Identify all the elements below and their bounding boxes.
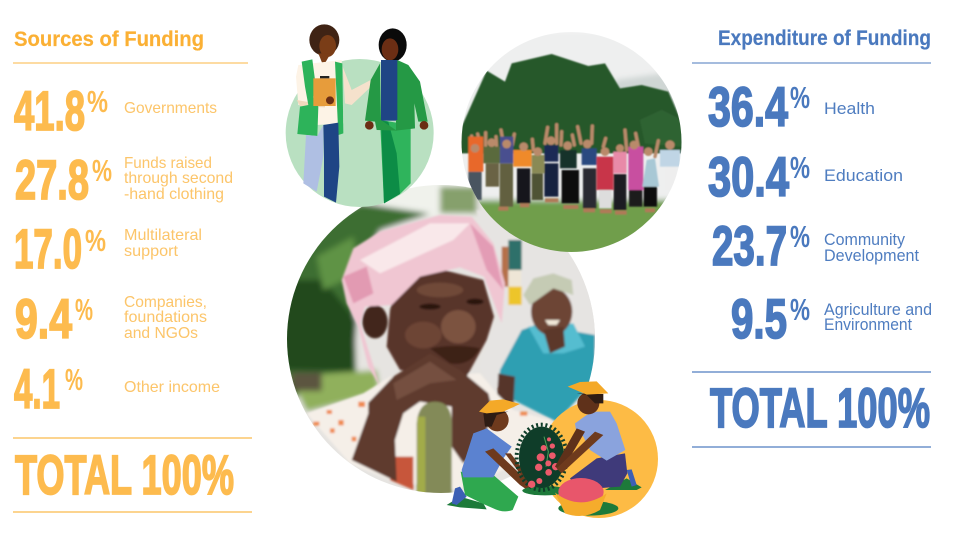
yellow circle background (540, 400, 658, 518)
stat: education: % (790, 150, 810, 185)
stat: education: 30.4 (708, 146, 789, 208)
stat: multilateral support: Multilateral (124, 227, 202, 244)
stat: second-hand clothing: -hand clothing (124, 186, 224, 203)
stat: second-hand clothing: through second (124, 170, 233, 187)
stat: governments: 41.8 (14, 80, 85, 142)
stat: companies: and NGOs (124, 325, 198, 342)
left farmer (447, 399, 533, 511)
stat: companies: Companies, (124, 294, 207, 311)
stat: community development: % (790, 219, 810, 254)
heading: sources of funding: Sources of Funding (14, 27, 204, 51)
stat: community development: 23.7 (712, 215, 787, 277)
stat: multilateral support: % (85, 223, 106, 258)
stat: other income: 4.1 (14, 358, 60, 420)
stat: community development (712, 215, 919, 277)
stat: governments: % (87, 84, 108, 119)
stat: multilateral support: 17.0 (14, 218, 82, 280)
panel: sources of funding (13, 27, 252, 512)
bowl of fruit (555, 478, 618, 516)
photo: smiling woman with pink headwrap (280, 180, 600, 500)
stat: community development: Community (824, 231, 906, 249)
stat: companies: 9.4 (15, 288, 72, 350)
stat: governments (14, 80, 217, 142)
stat: companies: % (75, 292, 93, 327)
illustration: two farmers harvesting fruit (447, 381, 658, 518)
panel: expenditure of funding (692, 26, 932, 447)
fruit bush (517, 425, 568, 495)
stat: health: % (790, 80, 810, 115)
stat: second-hand clothing (15, 149, 233, 211)
total: sources: TOTAL 100% (15, 444, 234, 506)
right farmer (555, 381, 642, 490)
stat: other income (14, 358, 220, 420)
stat: other income: Other income (124, 379, 220, 396)
right worker (365, 28, 428, 203)
stat: agriculture and environment: 9.5 (731, 288, 787, 350)
stat: multilateral support: support (124, 243, 179, 260)
stat: second-hand clothing: 27.8 (15, 149, 89, 211)
stat: governments: Governments (124, 100, 217, 117)
stat: multilateral support (14, 218, 202, 280)
stat: agriculture and environment: Agriculture and (824, 301, 932, 319)
stat: community development: Development (824, 247, 919, 265)
left worker (296, 24, 372, 203)
stat: companies (15, 288, 207, 350)
stat: other income: % (65, 362, 83, 397)
green circle background (286, 59, 434, 207)
stat: education: Education (824, 167, 903, 185)
heading: expenditure of funding: Expenditure of Funding (718, 26, 931, 50)
stat: agriculture and environment: % (790, 292, 810, 327)
illustration: two aid workers in green circle (286, 24, 434, 207)
stat: agriculture and environment: Environment (824, 316, 912, 334)
stat: health: Health (824, 100, 875, 118)
photo: children jumping in a field (455, 30, 690, 257)
stat: health: 36.4 (708, 76, 788, 138)
stat: companies: foundations (124, 309, 207, 326)
stat: education (708, 146, 903, 208)
stat: second-hand clothing: % (92, 153, 112, 188)
stat: agriculture and environment (731, 288, 932, 350)
stat: health (708, 76, 875, 138)
stat: second-hand clothing: Funds raised (124, 155, 212, 172)
